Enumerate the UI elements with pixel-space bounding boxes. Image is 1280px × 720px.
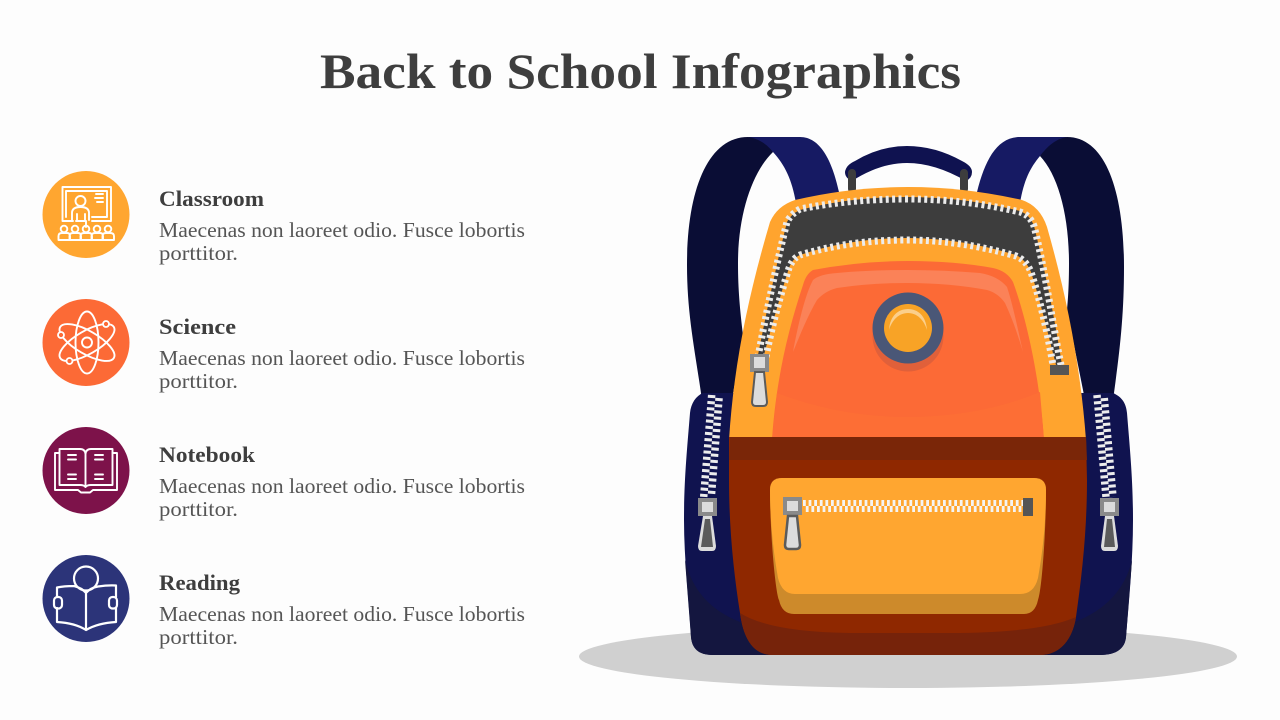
text: reading description: porttitor.	[159, 625, 238, 649]
icon: atom	[42, 299, 130, 386]
front pocket zipper	[783, 497, 1033, 549]
orange upper pocket	[772, 261, 1044, 440]
panel: science	[42, 299, 525, 393]
right side pocket	[1025, 393, 1133, 655]
title: Back to School Infographics	[320, 43, 961, 99]
text: science description: porttitor.	[159, 369, 238, 393]
front pocket	[770, 478, 1046, 614]
text: classroom description: porttitor.	[159, 241, 238, 265]
backpack illustration	[684, 137, 1133, 655]
lower compartment	[729, 437, 1087, 655]
panel: classroom	[42, 171, 525, 265]
panel: notebook	[42, 427, 525, 521]
left side pocket	[684, 393, 790, 655]
icon: open book	[42, 427, 130, 514]
backpack upper body	[729, 187, 1086, 440]
button badge	[872, 292, 944, 372]
right strap	[977, 137, 1124, 400]
text: reading description: Maecenas non laoreet odio. Fusce lobortis	[159, 602, 525, 626]
heading: science: Science	[159, 314, 236, 339]
icon: classroom	[42, 171, 130, 258]
left side zipper	[698, 395, 719, 551]
heading: notebook: Notebook	[159, 442, 256, 467]
ground shadow	[579, 625, 1237, 688]
icon: person reading	[42, 555, 130, 642]
left strap	[687, 137, 839, 400]
text: notebook description: porttitor.	[159, 497, 238, 521]
text: notebook description: Maecenas non laoreet odio. Fusce lobortis	[159, 474, 525, 498]
right side zipper	[1097, 395, 1119, 551]
zipper teeth	[758, 199, 1061, 365]
heading: reading: Reading	[159, 570, 240, 595]
panel: reading	[42, 555, 525, 649]
top handle	[845, 146, 972, 193]
front flap with zipper	[750, 197, 1069, 406]
text: classroom description: Maecenas non laoreet odio. Fusce lobortis	[159, 218, 525, 242]
heading: classroom: Classroom	[159, 186, 264, 211]
text: science description: Maecenas non laoreet odio. Fusce lobortis	[159, 346, 525, 370]
